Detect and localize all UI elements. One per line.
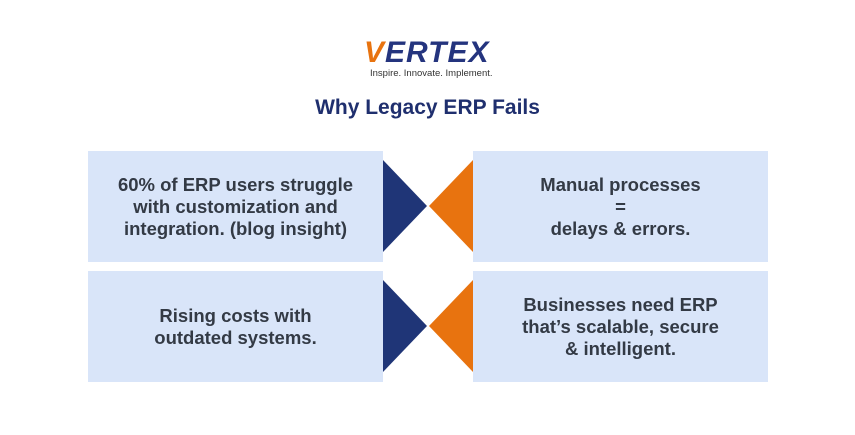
panel: manual processes: Manual processes bbox=[540, 174, 701, 194]
panel: scalable bbox=[473, 271, 768, 382]
panel: rising costs bbox=[88, 271, 383, 382]
panel: manual processes: delays & errors. bbox=[551, 218, 690, 238]
panel: scalable: Businesses need ERP bbox=[523, 294, 718, 314]
panel: rising costs: Rising costs with bbox=[159, 304, 312, 326]
panel: customization: 60% of ERP users struggle bbox=[118, 174, 353, 194]
panel: scalable: & intelligent. bbox=[565, 338, 676, 358]
icon: connector triangles row 2 bbox=[383, 280, 473, 372]
logo bbox=[364, 36, 493, 79]
panel: customization: with customization and bbox=[133, 196, 338, 216]
panel: manual processes bbox=[473, 151, 768, 262]
panel: scalable: that’s scalable, secure bbox=[522, 316, 719, 336]
title: Why Legacy ERP Fails bbox=[315, 96, 540, 119]
panel: customization: integration. (blog insight) bbox=[124, 218, 347, 238]
panel: customization bbox=[88, 151, 383, 262]
panel: manual processes: = bbox=[615, 196, 626, 216]
panel: rising costs: outdated systems. bbox=[154, 326, 317, 348]
icon: connector triangles row 1 bbox=[383, 160, 473, 252]
logo: wordmark: VERTEX bbox=[364, 36, 490, 69]
logo: tagline: Inspire. Innovate. Implement. bbox=[370, 68, 493, 79]
